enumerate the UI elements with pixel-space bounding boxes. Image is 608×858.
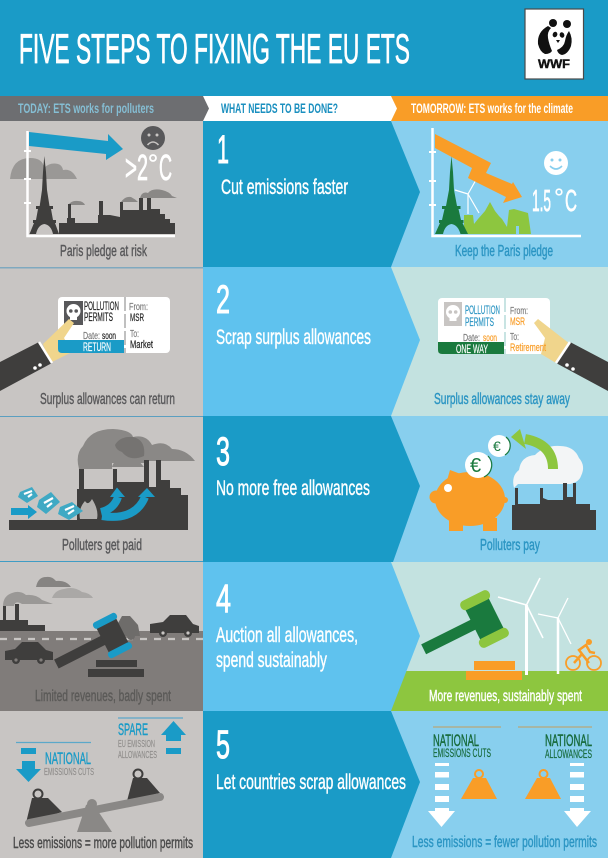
factory: [512, 483, 596, 530]
gavel block: [466, 661, 522, 680]
curved arrows: [101, 488, 155, 517]
chart: tomorrow temperature fall: [429, 128, 581, 260]
permit card: MSR: [130, 312, 144, 324]
illustration: weights, fewer permits: [412, 727, 597, 851]
arrow: [435, 134, 522, 203]
arrow: [29, 132, 123, 160]
header band: today: [0, 96, 209, 121]
icon: smiley: [544, 151, 568, 175]
caption: Limited revenues, badly spent: [35, 688, 171, 705]
permit card: Date:: [463, 332, 480, 344]
header band: today: TODAY: ETS works for polluters: [18, 101, 154, 116]
factories: [59, 198, 175, 234]
gavel: [412, 589, 510, 673]
step 1 text: Cut emissions faster: [221, 176, 348, 199]
right column backgrounds: [380, 121, 608, 858]
arrow in: [11, 505, 37, 519]
temperature label: 1.5: [532, 183, 551, 218]
illustration: limited revenues: [0, 577, 203, 711]
car right: [150, 615, 199, 637]
gavel: [47, 612, 133, 682]
caption: Polluters get paid: [62, 537, 142, 554]
smoke: [68, 189, 177, 205]
factory: [9, 460, 188, 530]
chart: today temperature rise: [10, 126, 177, 260]
permit card: PERMITS: [84, 312, 113, 324]
step number 1: 1: [217, 128, 229, 172]
sleeve: [0, 342, 52, 391]
gavel block: [88, 660, 144, 677]
step 2 text: Scrap surplus allowances: [216, 326, 371, 349]
destination text: Retirement: [510, 342, 546, 354]
piggy bank: [430, 470, 508, 531]
coins: [465, 435, 510, 478]
permit card: soon: [102, 330, 116, 342]
grass, step 4 right: [390, 671, 608, 711]
destination text: [510, 316, 546, 354]
logo: WWF panda: WWF: [538, 59, 570, 71]
coins: €: [470, 455, 481, 477]
car left: [5, 642, 53, 664]
allowance bundles: [18, 487, 83, 520]
national emissions label: [16, 742, 94, 782]
seesaw: [26, 770, 160, 832]
coins: €: [493, 438, 501, 454]
spare allowances label: EU EMISSION: [118, 738, 155, 750]
icon: sad face: [141, 126, 165, 150]
caption: Less emissions = more pollution permits: [13, 835, 193, 852]
wind turbine: [455, 178, 479, 214]
icon: Eiffel tower, green: [435, 156, 468, 234]
right down arrow: [564, 763, 591, 827]
smoke clouds: [78, 429, 195, 469]
logo: WWF panda: [525, 9, 584, 79]
white smoke cloud: [513, 446, 583, 488]
clouds: [10, 158, 77, 179]
spare allowances label: ALLOWANCES: [118, 749, 157, 761]
caption: Surplus allowances can return: [40, 391, 175, 408]
step 5 text: Let countries scrap allowances: [216, 771, 406, 794]
step number 2: 2: [216, 278, 230, 322]
permit card: From:: [129, 301, 148, 313]
header band: what needs to be done: WHAT NEEDS TO BE DONE?: [221, 101, 338, 116]
permit card: ONE WAY: [456, 344, 488, 356]
panel: step 2 chevron: [203, 267, 420, 416]
caption: Keep the Paris pledge: [455, 243, 553, 260]
car behind gavel: [108, 616, 140, 640]
step number 4: 4: [216, 577, 231, 621]
caption: Paris pledge at risk: [60, 243, 148, 260]
green arrow: [511, 429, 553, 469]
illustration: more revenues: [412, 578, 601, 705]
illustration: polluters get paid: [9, 429, 195, 554]
permit card: [58, 297, 170, 353]
permit card: POLLUTION: [84, 301, 119, 313]
illustration: polluters pay: [430, 429, 596, 554]
factory: [0, 604, 45, 631]
permit card: Market: [130, 339, 153, 351]
axes: [28, 131, 175, 236]
flame: [80, 499, 97, 519]
step number 3: 3: [216, 430, 230, 474]
header background: [0, 0, 608, 97]
right label: [518, 727, 592, 761]
permit card: [438, 298, 550, 356]
panel: step 1 chevron: [203, 121, 420, 267]
return bar: RETURN: [83, 342, 111, 354]
return bar: [58, 340, 124, 354]
destination text: MSR: [510, 316, 525, 328]
panel: step 5 chevron: [203, 711, 420, 858]
header band: what needs to be done: [203, 96, 397, 121]
panel: step 4 chevron: [203, 562, 420, 711]
permit card: To:: [130, 328, 139, 340]
permit card: soon: [483, 332, 497, 344]
step number 5: 5: [216, 723, 230, 767]
step 3 text: No more free allowances: [216, 477, 370, 500]
icon: skull: [444, 302, 462, 326]
right weight: [525, 770, 561, 799]
national emissions label: NATIONAL: [45, 750, 91, 768]
permit card: PERMITS: [465, 317, 494, 329]
weight left: [26, 790, 62, 823]
permit card: Date:: [83, 330, 100, 342]
header band: tomorrow: [391, 96, 608, 121]
hand and arm: [43, 319, 74, 363]
axes: [432, 128, 581, 236]
green skyline: [464, 202, 531, 234]
left label: EMISSIONS CUTS: [433, 748, 491, 760]
left column background: [0, 121, 203, 858]
illustration: seesaw, more permits: [13, 718, 193, 852]
step 4 text: Auction all allowances,: [216, 624, 358, 647]
road: [0, 631, 203, 711]
panel: step 3 chevron: [203, 416, 420, 562]
illustration: permit returning to market: [0, 297, 175, 408]
left label: NATIONAL: [433, 732, 479, 750]
temperature label: C: [565, 183, 577, 218]
weight right: [127, 770, 160, 801]
caption: Polluters pay: [480, 537, 540, 554]
spare allowances label: SPARE: [118, 721, 148, 739]
left weight: [461, 770, 497, 799]
permit card: From:: [510, 305, 528, 317]
left down arrow: [428, 763, 455, 827]
step 4 text: spend sustainably: [216, 649, 327, 672]
national emissions label: EMISSIONS CUTS: [44, 766, 94, 778]
icon: cyclist: [566, 639, 601, 670]
icon: skull: [64, 301, 83, 325]
wind turbines: [498, 578, 571, 675]
illustration: permit going to retirement: [434, 298, 608, 408]
temperature label: C: [159, 147, 172, 188]
destination text: To:: [510, 331, 519, 343]
spare allowances label: [118, 718, 186, 761]
temperature label: 2: [137, 147, 148, 188]
clouds: [36, 577, 71, 587]
left label: [433, 727, 501, 760]
hand and arm: [534, 319, 608, 391]
temperature label: [125, 147, 172, 188]
icon: Eiffel tower: [30, 156, 59, 234]
temperature label: >: [125, 147, 137, 188]
step 4 text: [216, 624, 358, 672]
permit card: POLLUTION: [465, 305, 500, 317]
